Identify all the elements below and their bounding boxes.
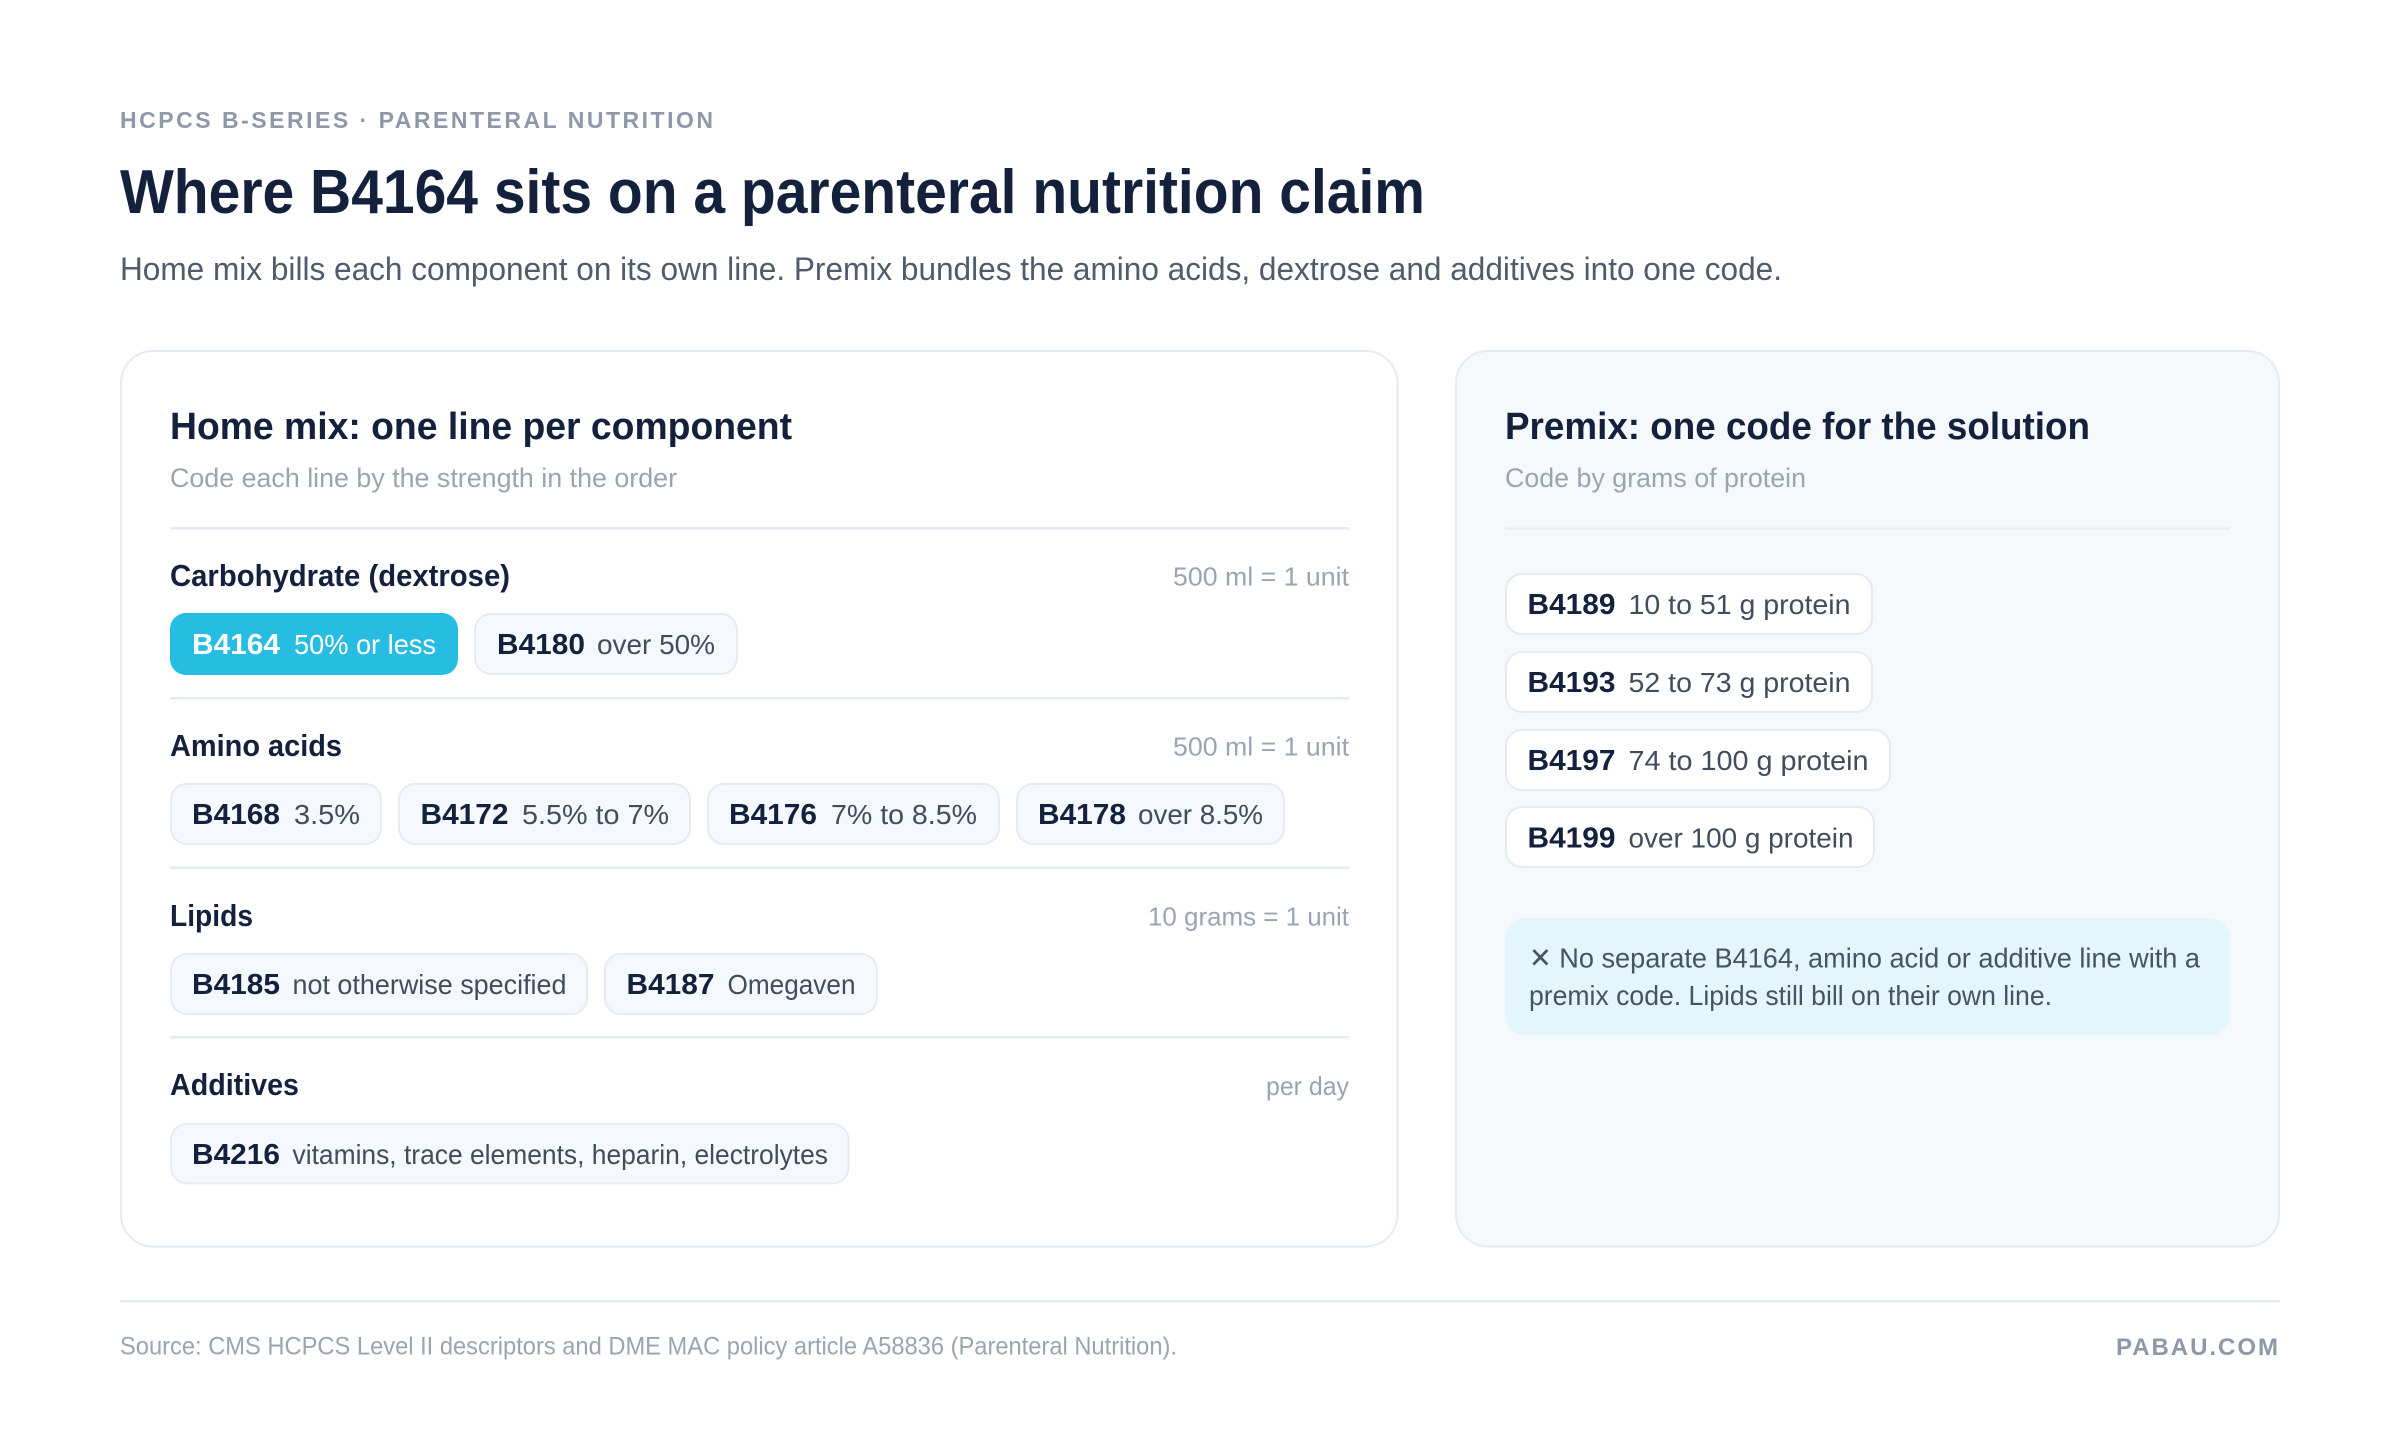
chip: B4189: B4189 bbox=[1528, 589, 1616, 621]
chip: B4197: B4197 bbox=[1528, 745, 1616, 777]
callout: no separate lines: ✕ No separate B4164, amino acid or additive line with a bbox=[1529, 942, 2200, 974]
home mix subheading: Code each line by the strength in the order bbox=[170, 463, 677, 493]
chip: B4199: B4199 bbox=[1528, 822, 1616, 854]
chip: B4193: B4193 bbox=[1528, 667, 1616, 699]
unit: carbohydrate: 500 ml = 1 unit bbox=[1173, 562, 1350, 592]
panel: home mix bbox=[121, 351, 1398, 1246]
chip: B4216 bbox=[171, 1124, 848, 1184]
chip: B4168 bbox=[171, 784, 381, 844]
row label: additives: Additives bbox=[170, 1067, 299, 1102]
row label: carbohydrate: Carbohydrate (dextrose) bbox=[170, 558, 510, 593]
chip: B4199: over 100 g protein bbox=[1628, 822, 1854, 854]
premix heading: Premix: one code for the solution bbox=[1505, 406, 2090, 448]
chip: B4185 bbox=[171, 954, 587, 1014]
chip: B4180: B4180 bbox=[497, 629, 585, 661]
chip: B4187: B4187 bbox=[626, 969, 714, 1001]
unit: lipids: 10 grams = 1 unit bbox=[1148, 902, 1350, 932]
chip: B4176: B4176 bbox=[729, 799, 817, 831]
chip: B4185: B4185 bbox=[192, 969, 280, 1001]
callout: no separate lines: premix code. Lipids still bill on their own line. bbox=[1529, 980, 2052, 1011]
unit: additives: per day bbox=[1266, 1071, 1349, 1101]
row label: amino acids: Amino acids bbox=[170, 728, 342, 763]
row: amino acids bbox=[170, 728, 1350, 844]
chip: B4216: vitamins, trace elements, heparin, electrolytes bbox=[292, 1139, 828, 1170]
chip: B4172: 5.5% to 7% bbox=[522, 799, 669, 830]
chip: B4189: 10 to 51 g protein bbox=[1628, 589, 1850, 620]
chip: B4185: not otherwise specified bbox=[292, 969, 566, 1000]
eyebrow: HCPCS B-SERIES · PARENTERAL NUTRITION bbox=[120, 107, 713, 133]
premix subheading: Code by grams of protein bbox=[1505, 463, 1806, 493]
chip: B4178: over 8.5% bbox=[1138, 799, 1263, 830]
callout: no separate lines bbox=[1505, 918, 2230, 1035]
subtitle: Home mix bills each component on its own line. Premix bundles the amino acids, dextrose and additives into one code. bbox=[120, 251, 1782, 287]
chip: B4187 bbox=[605, 954, 877, 1014]
chip: B4178: B4178 bbox=[1038, 799, 1126, 831]
chip: B4164 highlighted: B4164 bbox=[192, 629, 280, 661]
home mix heading: Home mix: one line per component bbox=[170, 406, 792, 448]
source note: Source: CMS HCPCS Level II descriptors and DME MAC policy article A58836 (Parenteral Nutrition). bbox=[120, 1332, 1177, 1360]
chip: B4193 bbox=[1506, 652, 1872, 712]
row: carbohydrate bbox=[170, 558, 1350, 675]
chip: B4187: Omegaven bbox=[728, 969, 856, 1000]
chip: B4180 bbox=[475, 614, 737, 674]
title: Where B4164 sits on a parenteral nutrition claim bbox=[120, 158, 1425, 227]
chip: B4176 bbox=[708, 784, 999, 844]
chip: B4180: over 50% bbox=[597, 629, 715, 660]
chip: B4168: 3.5% bbox=[294, 799, 360, 830]
unit: amino acids: 500 ml = 1 unit bbox=[1173, 732, 1350, 762]
chip: B4172 bbox=[399, 784, 690, 844]
chip: B4168: B4168 bbox=[192, 799, 280, 831]
chip: B4197: 74 to 100 g protein bbox=[1628, 745, 1868, 776]
brand: PABAU.COM bbox=[2116, 1334, 2278, 1361]
panel: premix bbox=[1456, 351, 2279, 1246]
chip: B4189 bbox=[1506, 574, 1872, 634]
chip: B4193: 52 to 73 g protein bbox=[1628, 667, 1850, 698]
chip: B4176: 7% to 8.5% bbox=[831, 799, 977, 830]
row label: lipids: Lipids bbox=[170, 898, 253, 933]
chip: B4197 bbox=[1506, 730, 1890, 790]
row: additives bbox=[170, 1067, 1349, 1184]
chip: B4216: B4216 bbox=[192, 1139, 280, 1171]
chip: B4172: B4172 bbox=[420, 799, 508, 831]
chip: B4178 bbox=[1017, 784, 1284, 844]
chip: B4164 highlighted bbox=[170, 613, 458, 675]
chip: B4199 bbox=[1506, 807, 1874, 867]
chip: B4164 highlighted: 50% or less bbox=[294, 629, 436, 660]
row: lipids bbox=[170, 898, 1350, 1014]
